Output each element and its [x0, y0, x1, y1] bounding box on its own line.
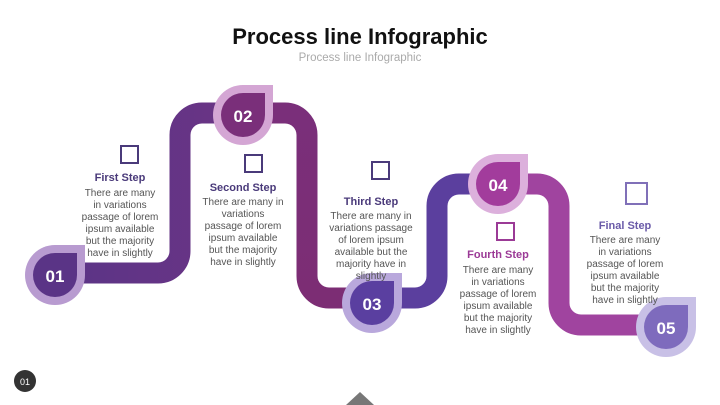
step 2 text: but the majority	[209, 245, 277, 256]
bottom triangle	[346, 392, 374, 405]
step 1 text	[82, 146, 158, 259]
step 5 text: Final Step	[599, 220, 652, 232]
process line path	[55, 113, 665, 325]
badge 04: 04	[489, 176, 508, 195]
step 4 text: ipsum available	[464, 301, 533, 312]
step 1 text: in variations	[93, 200, 147, 211]
step 4 text: have in slightly	[465, 325, 531, 336]
step 4 text: passage of lorem	[460, 289, 536, 300]
step 3 text	[329, 162, 413, 282]
page number: 01	[20, 377, 30, 387]
title: Process line Infographic	[232, 24, 488, 49]
step 4 text: in variations	[471, 277, 525, 288]
badge 02	[213, 85, 273, 145]
step 3 text: available but the	[335, 247, 408, 258]
badge 05	[636, 297, 696, 357]
step 5 text: have in slightly	[592, 295, 658, 306]
step 5 text	[587, 183, 663, 306]
step 3 text: variations passage	[329, 223, 413, 234]
badge 04	[468, 154, 528, 214]
step 2 text: passage of lorem	[205, 221, 281, 232]
page number	[14, 370, 36, 392]
step 1 text: have in slightly	[87, 248, 153, 259]
badge 05: 05	[657, 319, 675, 338]
step 4 text: There are many	[463, 265, 533, 276]
badge 01: 01	[46, 267, 64, 286]
step 1 text: but the majority	[86, 236, 154, 247]
step 5 text: There are many	[590, 235, 660, 246]
step 1 text: passage of lorem	[82, 212, 158, 223]
step 5 text: passage of lorem	[587, 259, 663, 270]
step 1 text: ipsum available	[86, 224, 155, 235]
step 2 text: Second Step	[210, 182, 277, 194]
badge 02: 02	[234, 107, 252, 126]
step 2 text: ipsum available	[209, 233, 278, 244]
step 1 text: There are many	[85, 188, 155, 199]
step 5 text: in variations	[598, 247, 652, 258]
subtitle: Process line Infographic	[299, 52, 422, 64]
step 2 text: have in slightly	[210, 257, 276, 268]
step 3 text: Third Step	[344, 196, 398, 208]
step 3 text: majority have in	[336, 259, 406, 270]
step 2 text: variations	[222, 209, 264, 220]
step 3 text: of lorem ipsum	[338, 235, 404, 246]
step 4 text: but the majority	[464, 313, 532, 324]
step 2 text: There are many in	[202, 197, 284, 208]
badge 01	[25, 245, 85, 305]
step 1 text: First Step	[95, 172, 146, 184]
step 2 text	[202, 155, 284, 268]
badge 03: 03	[363, 295, 381, 314]
step 5 text: ipsum available	[591, 271, 660, 282]
step 5 text: but the majority	[591, 283, 659, 294]
step 3 text: slightly	[356, 271, 386, 282]
badge 03	[342, 273, 402, 333]
step 3 text: There are many in	[330, 211, 412, 222]
step 4 text: Fourth Step	[467, 249, 529, 261]
step 4 text	[460, 223, 536, 336]
